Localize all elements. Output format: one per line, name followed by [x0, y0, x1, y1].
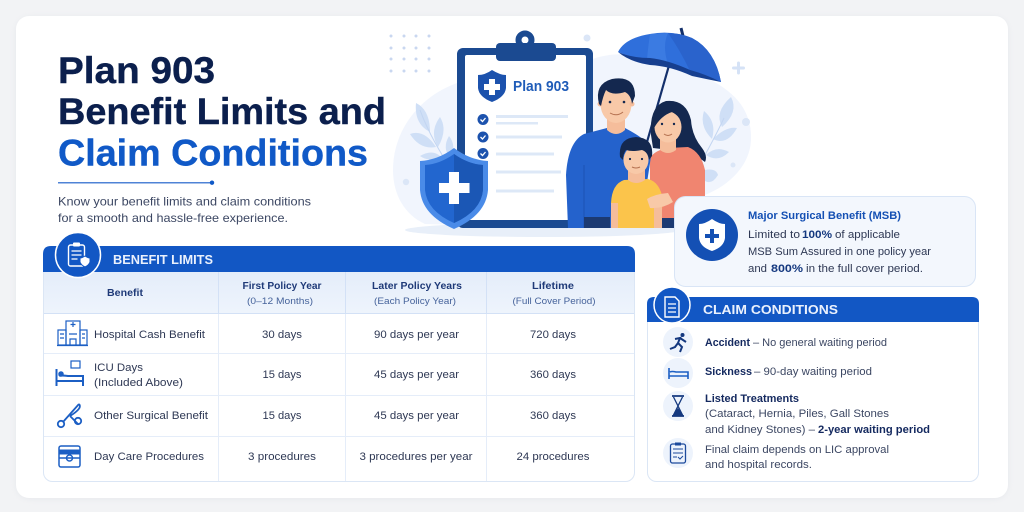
row: hospital cash benefit: Hospital Cash Benefit	[94, 329, 205, 341]
MSB heading: Major Surgical Benefit (MSB)	[748, 210, 901, 222]
MSB body text: in the full cover period.	[806, 263, 923, 275]
row: day care procedures: 3 procedures	[248, 451, 317, 463]
umbrella	[618, 28, 721, 142]
row: ICU days: 15 days	[262, 369, 302, 381]
icon: calendar	[59, 446, 80, 467]
row: other surgical benefit: Other Surgical Benefit	[94, 410, 208, 422]
MSB body text: Limited to	[748, 229, 800, 241]
large shield	[420, 148, 488, 229]
MSB body text	[748, 229, 931, 275]
row: sickness	[663, 358, 872, 388]
panel heading: BENEFIT LIMITS	[113, 252, 213, 267]
panel: benefit limits table	[43, 232, 635, 482]
illustration: clipboard, shield and family under umbrella	[390, 28, 751, 237]
row: ICU days: 45 days per year	[374, 369, 459, 381]
row: day care procedures	[59, 446, 590, 467]
MSB body text: and	[748, 263, 767, 275]
man	[566, 78, 652, 228]
row: other surgical benefit: 45 days per year	[374, 410, 459, 422]
row: listed treatments: and Kidney Stones) –	[705, 424, 816, 436]
row: day care procedures: 24 procedures	[516, 451, 590, 463]
ground shadow	[405, 223, 681, 237]
woman	[650, 101, 706, 228]
row: day care procedures: 3 procedures per year	[360, 451, 473, 463]
title: Plan 903	[58, 49, 215, 91]
icon: hourglass	[663, 391, 693, 421]
plus sparkle	[734, 63, 744, 73]
row: final claim note: Final claim depends on LIC approval	[705, 444, 889, 456]
panel: claim conditions	[647, 287, 979, 482]
column headers: Later Policy Years	[372, 280, 462, 292]
row: accident: – No general waiting period	[753, 337, 887, 349]
background blobs	[393, 54, 751, 225]
row: other surgical benefit: 360 days	[530, 410, 577, 422]
row: sickness: – 90-day waiting period	[754, 366, 872, 378]
row: accident	[663, 327, 887, 357]
right leaves	[703, 97, 737, 182]
dot grid	[390, 34, 430, 72]
row: listed treatments: Listed Treatments	[705, 393, 799, 405]
table column header band	[44, 272, 634, 313]
icon: hospital	[57, 321, 88, 346]
boy	[611, 137, 673, 228]
icon: runner	[663, 327, 693, 357]
title underline	[58, 180, 214, 185]
clipboard shield	[478, 70, 506, 102]
subtitle: for a smooth and hassle-free experience.	[58, 211, 288, 225]
row: other surgical benefit	[58, 404, 577, 427]
row: ICU days	[56, 361, 577, 389]
subtitle	[58, 194, 311, 225]
checklist	[478, 114, 568, 192]
column headers: First Policy Year	[242, 280, 322, 292]
header bar	[647, 297, 979, 322]
row: listed treatments: 2-year waiting period	[818, 424, 930, 436]
clipboard	[457, 34, 593, 228]
header bar	[43, 246, 635, 272]
left leaves	[410, 103, 453, 160]
column headers: Benefit	[107, 287, 144, 299]
row: hospital cash benefit: 90 days per year	[374, 329, 459, 341]
header icon	[56, 232, 100, 278]
row: final claim note	[663, 438, 889, 471]
column headers: (0–12 Months)	[247, 296, 313, 307]
panel heading: CLAIM CONDITIONS	[703, 302, 838, 317]
title: Claim Conditions	[58, 132, 368, 174]
column headers	[107, 280, 596, 307]
icon: surgical scissors	[58, 404, 81, 427]
row: hospital cash benefit: 30 days	[262, 329, 303, 341]
column headers: Lifetime	[532, 280, 574, 292]
row: final claim note: and hospital records.	[705, 459, 812, 471]
icon: bed	[663, 358, 693, 388]
icon: MSB shield	[686, 209, 738, 261]
icon: ICU bed	[56, 361, 83, 386]
row: listed treatments: (Cataract, Hernia, Piles, Gall Stones	[705, 408, 890, 420]
MSB body text: 800%	[771, 263, 803, 275]
MSB body text: MSB Sum Assured in one policy year	[748, 246, 931, 258]
row: listed treatments	[663, 391, 930, 436]
MSB body text: of applicable	[835, 229, 900, 241]
column headers: (Full Cover Period)	[512, 296, 596, 307]
panel: major surgical benefit	[674, 196, 976, 286]
row: ICU days: (Included Above)	[94, 377, 183, 389]
MSB body text: 100%	[802, 229, 832, 241]
row: ICU days: 360 days	[530, 369, 577, 381]
clipboard heading: Plan 903	[513, 79, 569, 95]
title: Benefit Limits and	[58, 90, 386, 132]
header icon	[654, 287, 690, 323]
row: hospital cash benefit	[57, 321, 577, 346]
row: accident: Accident	[705, 337, 750, 349]
row: other surgical benefit: 15 days	[262, 410, 302, 422]
subtitle: Know your benefit limits and claim conditions	[58, 194, 311, 208]
row: day care procedures: Day Care Procedures	[94, 451, 205, 463]
title	[58, 49, 386, 174]
column headers: (Each Policy Year)	[374, 296, 456, 307]
row: hospital cash benefit: 720 days	[530, 329, 577, 341]
row: ICU days: ICU Days	[94, 362, 144, 374]
row: sickness: Sickness	[705, 366, 752, 378]
icon: checklist	[663, 438, 693, 468]
